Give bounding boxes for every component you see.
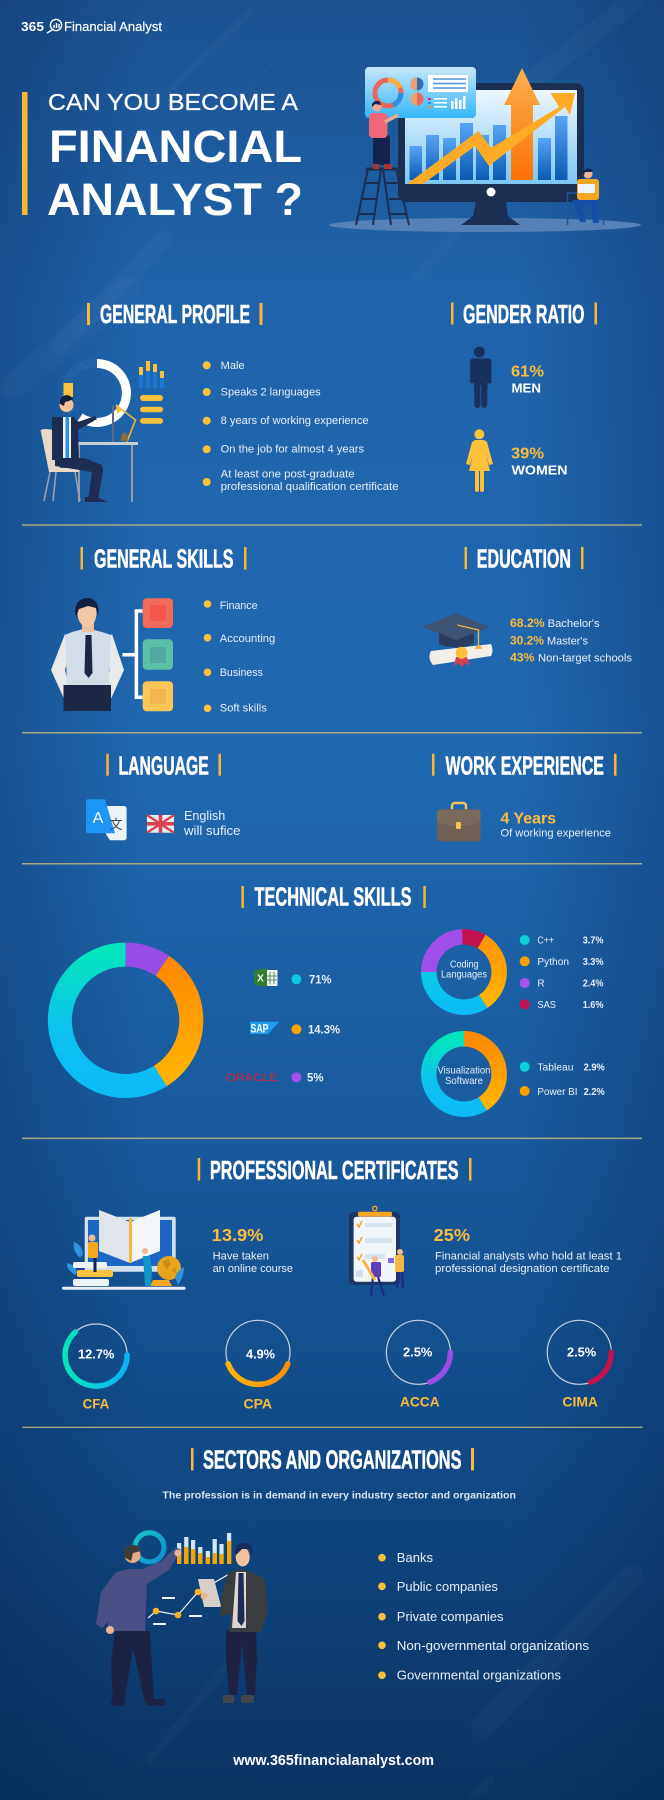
heading: technical skills: TECHNICAL SKILLS: [254, 881, 412, 911]
title: [22, 89, 303, 225]
list: profile traits: On the job for almost 4 years: [221, 444, 365, 456]
legend: coding languages: SAS: [537, 1000, 556, 1011]
icon: excel: [254, 968, 278, 987]
legend: coding languages: 2.4%: [583, 978, 604, 990]
heading: language: [106, 750, 221, 780]
stat: online course: Have taken: [213, 1250, 269, 1262]
stat: men: [511, 364, 544, 396]
icon: graduation cap and diploma: [423, 613, 492, 667]
text: english: English: [184, 809, 225, 823]
list: profile traits: 8 years of working experience: [221, 415, 369, 427]
chart: coding languages donut: [429, 937, 499, 1007]
legend: visualization software: 2.2%: [584, 1087, 605, 1098]
figure: standing woman: [369, 101, 398, 169]
legend row: oracle: 5%: [307, 1072, 324, 1084]
illustration: two analysts with charts: [96, 1533, 268, 1706]
icon: man: [470, 346, 492, 408]
list: education stats: 30.2%: [510, 635, 544, 647]
stat: men: 61%: [511, 364, 544, 381]
icon: translate: A: [93, 810, 104, 827]
legend: coding languages: R: [537, 978, 545, 990]
legend: visualization software: 2.9%: [584, 1062, 605, 1074]
gauge: cpa: CPA: [244, 1397, 272, 1412]
icon: sap: SAP: [250, 1024, 269, 1036]
title: CAN YOU BECOME A: [48, 89, 298, 115]
list: profile traits: professional qualification certificate: [221, 481, 399, 493]
stat: women: [511, 445, 568, 478]
illustration: online course book: [62, 1210, 186, 1290]
heading: sectors and organizations: [191, 1444, 474, 1474]
heading: education: [464, 543, 584, 573]
list: sectors: Public companies: [397, 1579, 498, 1594]
chart: coding languages donut: Languages: [441, 969, 487, 981]
panel: professional certificates: [62, 1155, 622, 1412]
icon: translate: [86, 799, 127, 840]
panel: sectors and organizations: [96, 1444, 590, 1706]
list: profile traits: [203, 360, 399, 493]
panel: general profile: [41, 299, 399, 502]
icon: briefcase: [437, 803, 481, 841]
footer url: www.365financialanalyst.com: [232, 1753, 434, 1769]
gauge: cima: 2.5%: [567, 1345, 597, 1360]
icon: uk flag: [147, 815, 174, 833]
list: general skills: Business: [220, 667, 263, 679]
panel: work experience: [432, 750, 616, 841]
legend: coding languages: 1.6%: [583, 1000, 604, 1011]
subtitle: The profession is in demand in every industry sector and organization: [162, 1490, 516, 1502]
list: sectors: Governmental organizations: [397, 1668, 562, 1682]
legend: visualization software: [520, 1062, 605, 1098]
figure: analyst with tablet: [198, 1543, 268, 1703]
gauge: acca: [386, 1320, 450, 1410]
title: FINANCIAL: [49, 121, 302, 172]
illustration: monitor with growth chart: [329, 67, 641, 232]
logo: [21, 19, 163, 34]
panel: general skills: [51, 543, 275, 714]
legend row: excel: [291, 974, 332, 986]
logo: Financial Analyst: [64, 20, 163, 34]
gauge: acca: 2.5%: [403, 1345, 433, 1360]
gauge: cfa: [65, 1324, 127, 1412]
stat: four years: 4 Years: [500, 810, 556, 827]
icon: excel: X: [257, 974, 264, 984]
gauge: cima: CIMA: [562, 1395, 598, 1410]
illustration: man with skill tree: [51, 598, 173, 711]
heading: general profile: GENERAL PROFILE: [100, 299, 250, 329]
list: education stats: Master's: [547, 635, 588, 647]
stat: four years: [500, 810, 611, 840]
panel: dashboard card: [365, 67, 476, 118]
list: education stats: 68.2%: [510, 618, 545, 630]
figure: seated man with laptop: [567, 169, 604, 225]
gauge: cima: [547, 1320, 611, 1410]
list: education stats: Non-target schools: [538, 653, 633, 665]
heading: language: LANGUAGE: [118, 750, 209, 780]
legend row: oracle: [291, 1072, 324, 1084]
stat: online course: an online course: [213, 1263, 293, 1275]
list: profile traits: Male: [221, 360, 245, 372]
stat: designation holders: Financial analysts who hold at least 1: [435, 1250, 622, 1262]
panel: gender ratio: [451, 299, 597, 492]
stat: designation holders: professional designation certificate: [435, 1263, 610, 1275]
gauge: cpa: 4.9%: [246, 1346, 275, 1361]
stat: women: 39%: [511, 445, 544, 462]
heading: general profile: [87, 299, 262, 329]
icon: sap: [250, 1022, 280, 1036]
logo: 365: [21, 20, 44, 34]
chart: visualization software donut: Visualization: [438, 1064, 491, 1076]
legend row: sap: [291, 1024, 340, 1036]
stat: online course: 13.9%: [212, 1225, 264, 1245]
heading: gender ratio: GENDER RATIO: [463, 299, 584, 329]
chart: main donut: [60, 955, 191, 1086]
heading: professional certificates: PROFESSIONAL CERTIFICATES: [210, 1155, 458, 1185]
title: ANALYST ?: [47, 174, 303, 225]
list: sectors: Private companies: [397, 1609, 504, 1624]
legend: coding languages: Python: [537, 957, 569, 968]
legend: visualization software: Tableau: [537, 1062, 574, 1074]
legend row: sap: 14.3%: [308, 1024, 340, 1036]
chart: visualization software donut: Software: [445, 1075, 483, 1087]
gauge: acca: ACCA: [400, 1395, 440, 1410]
list: education stats: [510, 618, 633, 665]
gauge: cfa: 12.7%: [78, 1346, 115, 1361]
icon: translate: 文: [109, 817, 123, 832]
stat: men: MEN: [512, 381, 541, 396]
text: english: will sufice: [183, 824, 241, 838]
list: sectors: Non-governmental organizations: [397, 1638, 590, 1653]
list: sectors: Banks: [397, 1550, 433, 1565]
heading: sectors and organizations: SECTORS AND ORGANIZATIONS: [203, 1444, 462, 1474]
icon: woman: [466, 429, 493, 492]
list: education stats: Bachelor's: [548, 618, 600, 630]
stat: four years: Of working experience: [500, 828, 611, 840]
stat: women: WOMEN: [512, 463, 568, 478]
illustration: analyst at desk: [41, 361, 164, 502]
icon: oracle: ORACLE: [226, 1072, 278, 1084]
list: general skills: [204, 600, 275, 714]
text: english: [183, 809, 241, 838]
list: general skills: Finance: [220, 600, 258, 612]
ladder: [356, 169, 409, 225]
panel: education: [423, 543, 633, 667]
legend: coding languages: 3.7%: [583, 936, 604, 946]
legend: visualization software: Power BI: [537, 1087, 578, 1098]
legend: coding languages: C++: [537, 936, 554, 946]
legend: coding languages: [520, 935, 604, 1011]
list: profile traits: At least one post-graduate: [221, 468, 355, 480]
gauge: cfa: CFA: [83, 1397, 110, 1412]
stat: designation holders: 25%: [434, 1225, 470, 1245]
heading: general skills: GENERAL SKILLS: [94, 543, 234, 573]
legend: coding languages: 3.3%: [583, 957, 604, 968]
figure: analyst seen from behind: [96, 1545, 182, 1706]
stat: online course: [212, 1225, 293, 1275]
chart: visualization software donut: [429, 1039, 499, 1109]
heading: education: EDUCATION: [477, 543, 571, 573]
illustration: clipboard checklist: [349, 1206, 404, 1296]
list: general skills: Accounting: [220, 633, 275, 645]
icon: logo magnifier: [47, 19, 62, 33]
list: profile traits: Speaks 2 languages: [221, 386, 321, 398]
list: sectors: [378, 1550, 590, 1682]
chart: coding languages donut: Coding: [450, 958, 479, 970]
stat: designation holders: [434, 1225, 622, 1275]
gauge: cpa: [226, 1320, 290, 1412]
legend row: excel: 71%: [309, 974, 332, 986]
list: general skills: Soft skills: [220, 702, 267, 714]
panel: language: [86, 750, 241, 840]
list: education stats: 43%: [510, 653, 534, 665]
panel: technical skills: [60, 881, 605, 1109]
